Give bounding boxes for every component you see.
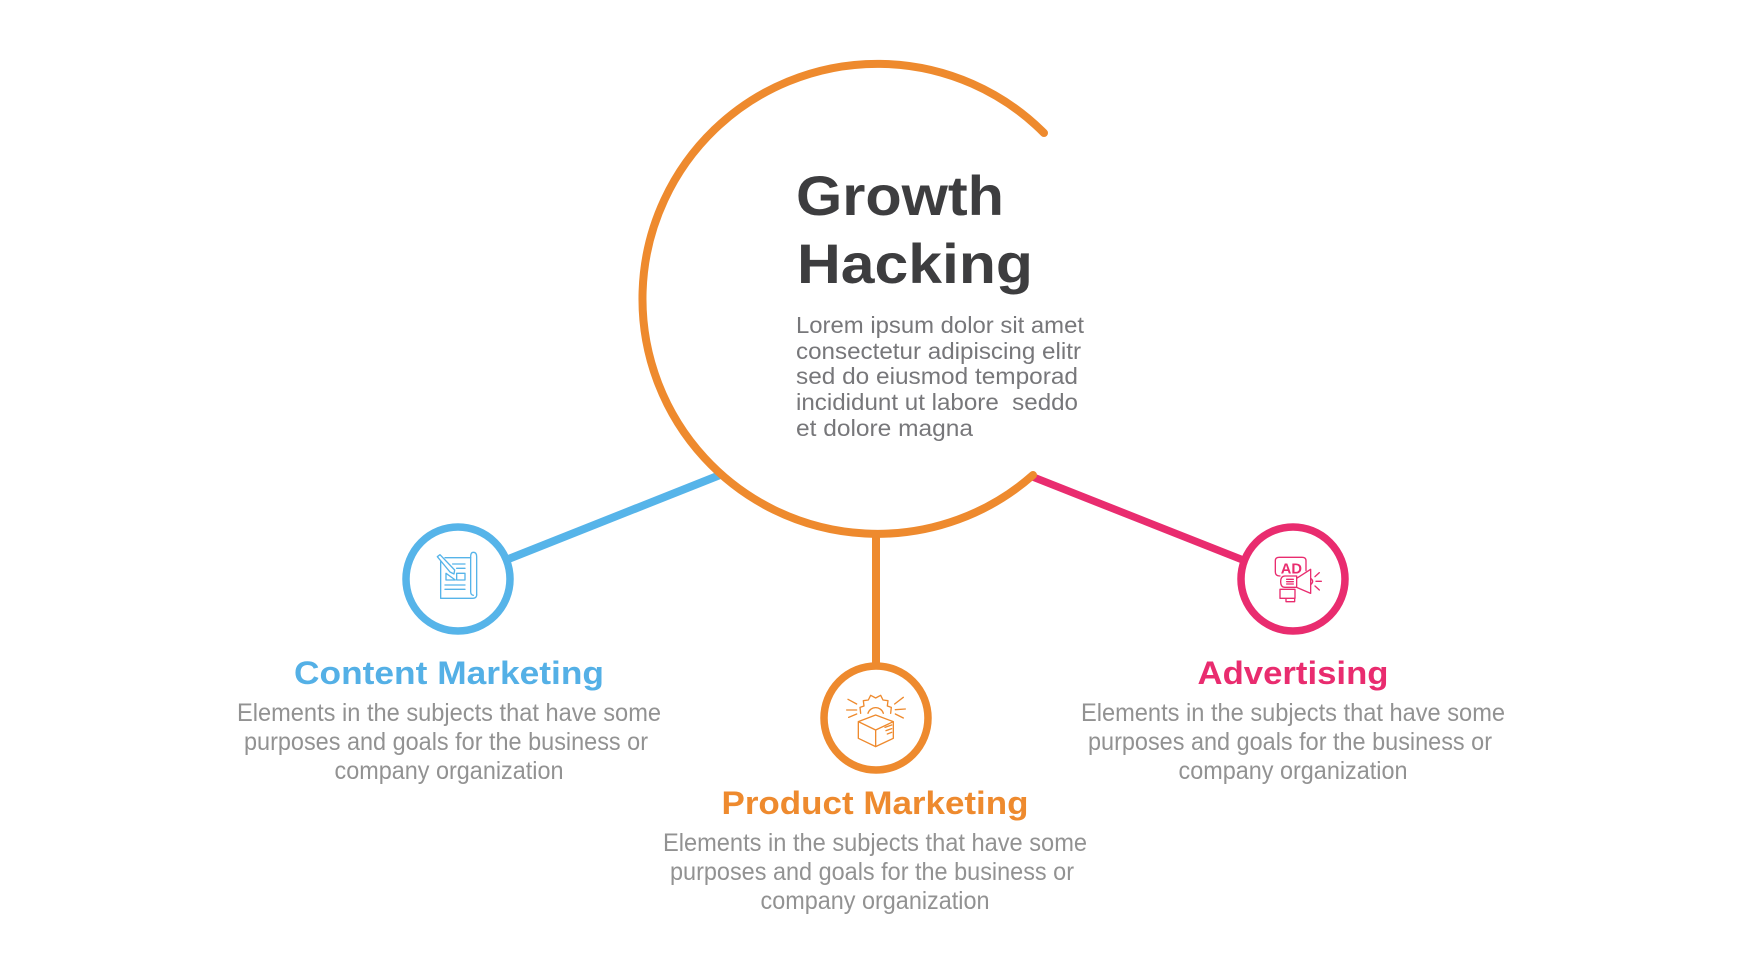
- description: content marketing: purposes and goals for the business or: [244, 728, 648, 756]
- description: product marketing: purposes and goals for the business or: [670, 858, 1074, 886]
- icon: ad megaphone: AD: [1281, 561, 1302, 577]
- heading: product marketing: Product Marketing: [722, 785, 1028, 821]
- description: advertising: [1081, 699, 1505, 785]
- connector: product marketing: [872, 535, 880, 665]
- title: Growth: [796, 164, 1004, 227]
- node: product marketing: [824, 666, 928, 770]
- description: advertising: Elements in the subjects that have some: [1081, 699, 1505, 727]
- central description: sed do eiusmod temporad: [796, 363, 1078, 389]
- central open ring: [642, 64, 1044, 534]
- connector: advertising: [1033, 477, 1248, 562]
- description: content marketing: Elements in the subjects that have some: [237, 699, 661, 727]
- central description: et dolore magna: [796, 415, 973, 441]
- icon: box with gear: [847, 695, 905, 747]
- title: [796, 164, 1033, 295]
- description: content marketing: company organization: [334, 757, 564, 785]
- icon: ad megaphone: [1275, 557, 1321, 602]
- title: Hacking: [797, 232, 1033, 295]
- heading: content marketing: Content Marketing: [294, 655, 604, 691]
- description: product marketing: company organization: [760, 887, 990, 915]
- connector: content marketing: [506, 475, 720, 560]
- description: advertising: purposes and goals for the business or: [1088, 728, 1492, 756]
- description: advertising: company organization: [1178, 757, 1408, 785]
- heading: advertising: Advertising: [1198, 655, 1388, 691]
- description: product marketing: [663, 829, 1087, 915]
- central description: Lorem ipsum dolor sit amet: [796, 312, 1085, 338]
- description: content marketing: [237, 699, 661, 785]
- central description: consectetur adipiscing elitr: [796, 338, 1081, 364]
- node: content marketing: [406, 527, 510, 631]
- node: advertising: [1241, 527, 1345, 631]
- central description: incididunt ut labore seddo: [796, 389, 1078, 415]
- central description: [796, 312, 1085, 441]
- description: product marketing: Elements in the subjects that have some: [663, 829, 1087, 857]
- icon: document with pencil: [437, 552, 477, 598]
